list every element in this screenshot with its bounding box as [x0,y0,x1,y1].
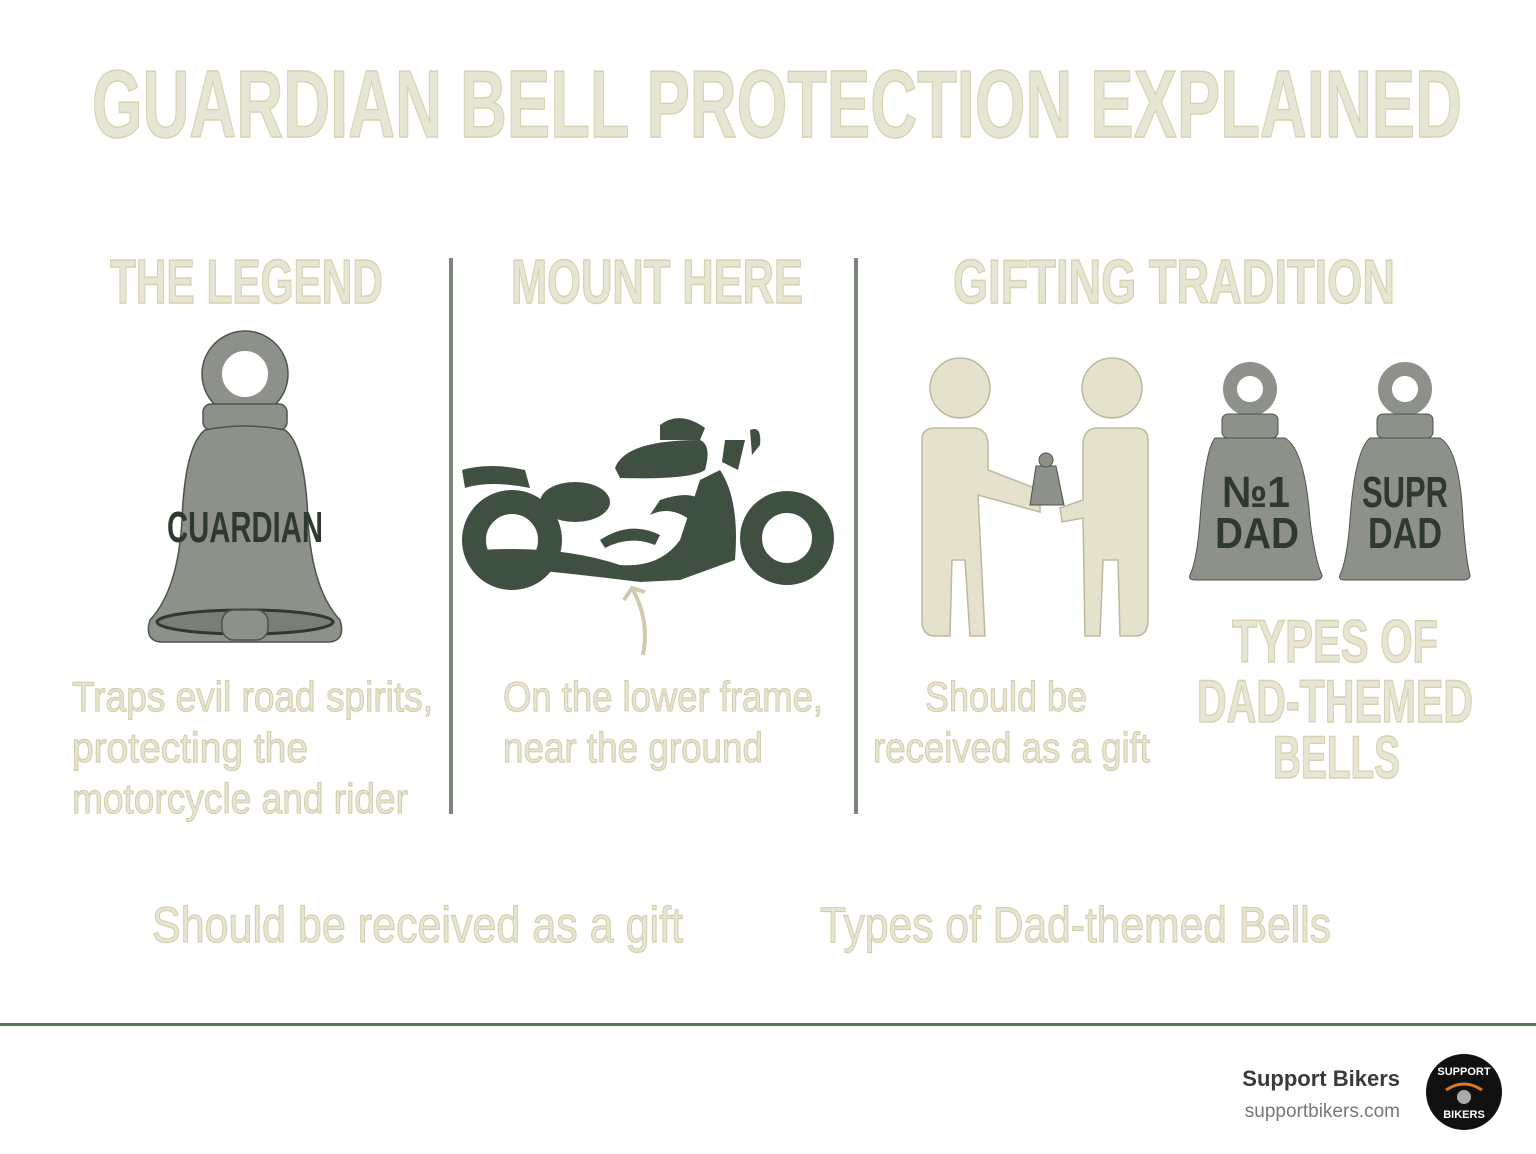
icon: supr dad bell: DAD [1368,509,1442,558]
heading: types of dad-themed bells: TYPES OF [1232,608,1438,675]
heading: types of dad-themed bells: BELLS [1273,724,1400,791]
icon: small gift bell [1030,453,1064,505]
arrow: mount point [624,588,645,655]
footer: brand [1242,1066,1400,1122]
text: legend description: Traps evil road spirits, [72,673,433,720]
icon: supr dad bell: SUPR [1362,468,1448,517]
icon: no1 dad bell: №1 [1222,468,1290,517]
text: legend description: protecting the [72,724,308,771]
text: bottom caption 1: Should be received as a gift [152,897,683,953]
footer: brand: Support Bikers [1242,1066,1400,1091]
text: legend description [72,673,433,822]
text: bottom caption 2: Types of Dad-themed Bells [820,897,1331,953]
icon: supr dad bell [1340,369,1470,580]
icon: logo [1426,1054,1502,1130]
icon: motorcycle [462,418,823,582]
icon: two people exchanging bell [922,358,1148,636]
text: gifting description: received as a gift [873,724,1150,771]
heading: types of dad-themed bells [1197,608,1473,791]
icon: guardian bell: CUARDIAN [167,503,323,552]
text: mount description: On the lower frame, [503,673,823,720]
text: gifting description: Should be [925,673,1087,720]
footer: brand: supportbikers.com [1245,1101,1400,1122]
heading: the legend: THE LEGEND [110,248,383,317]
text: mount description: near the ground [503,724,763,771]
icon: no1 dad bell: DAD [1215,509,1299,558]
icon: logo: SUPPORT [1437,1066,1491,1078]
text: legend description: motorcycle and rider [72,775,408,822]
icon: guardian bell [148,331,342,642]
heading: mount here: MOUNT HERE [511,248,803,317]
text: mount description [503,673,823,771]
icon: logo: BIKERS [1443,1109,1485,1121]
text: gifting description [873,673,1150,771]
icon: no1 dad bell [1190,369,1322,580]
